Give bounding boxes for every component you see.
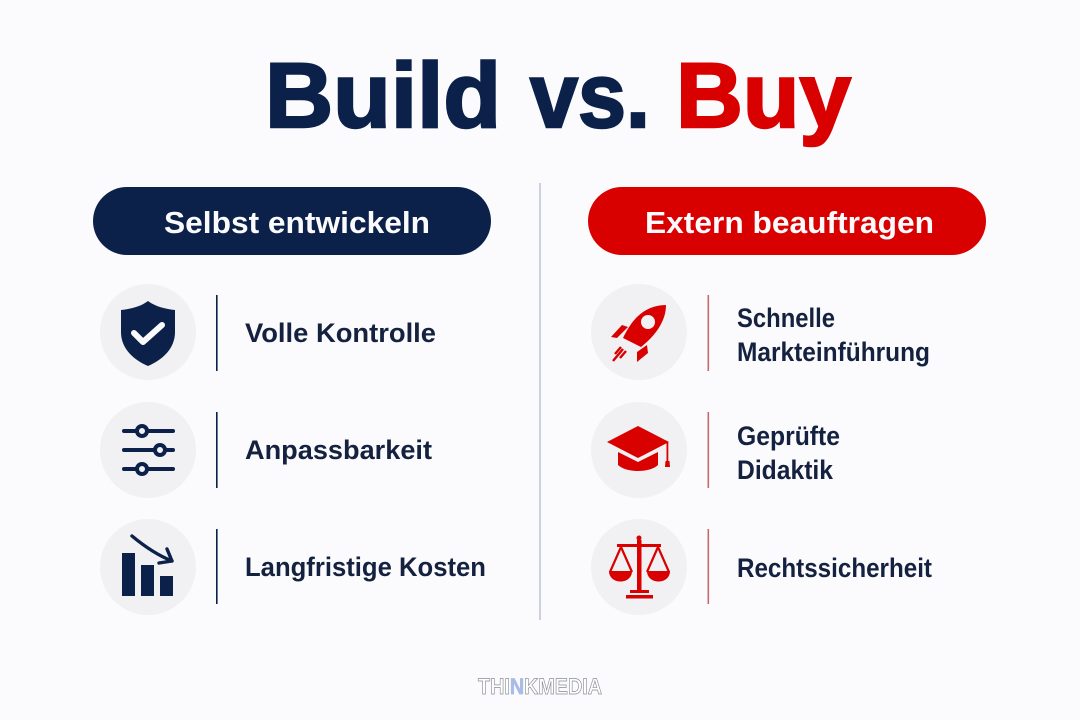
text: gepruefte didaktik: Didaktik (737, 455, 834, 485)
icon: graduation cap (607, 426, 670, 471)
text: schnelle markteinfuehrung (737, 303, 930, 367)
heading pill: extern beauftragen: Extern beauftragen (645, 205, 934, 240)
item: rechtssicherheit (591, 519, 932, 615)
item: anpassbarkeit (100, 402, 432, 498)
title (265, 45, 851, 147)
item: volle kontrolle (100, 284, 436, 380)
item: langfristige kosten: Langfristige Kosten (245, 552, 486, 582)
item: anpassbarkeit: Anpassbarkeit (245, 435, 432, 465)
item: rechtssicherheit: Rechtssicherheit (737, 553, 932, 583)
icon: scales (609, 536, 670, 598)
title: vs. (530, 45, 650, 147)
text: gepruefte didaktik (737, 421, 840, 485)
title: Build (265, 45, 501, 147)
title: Buy (676, 45, 851, 147)
logo: thinkmedia: THINKMEDIA (478, 674, 602, 699)
item: langfristige kosten (100, 519, 486, 615)
text: schnelle markteinfuehrung: Markteinführung (737, 337, 930, 367)
text: schnelle markteinfuehrung: Schnelle (737, 303, 835, 333)
item: volle kontrolle: Volle Kontrolle (245, 318, 436, 348)
text: gepruefte didaktik: Geprüfte (737, 421, 840, 451)
icon: rocket (611, 305, 666, 362)
icon: shield with check (121, 301, 175, 366)
icon: falling bar chart (122, 536, 173, 596)
panel: selbst entwickeln (93, 187, 491, 615)
item: schnelle markteinfuehrung (591, 284, 930, 380)
icon: sliders (124, 426, 173, 474)
panel: extern beauftragen (588, 187, 986, 615)
heading pill: extern beauftragen (588, 187, 986, 255)
item: gepruefte didaktik (591, 402, 840, 498)
heading pill: selbst entwickeln (93, 187, 491, 255)
heading pill: selbst entwickeln: Selbst entwickeln (164, 205, 430, 240)
